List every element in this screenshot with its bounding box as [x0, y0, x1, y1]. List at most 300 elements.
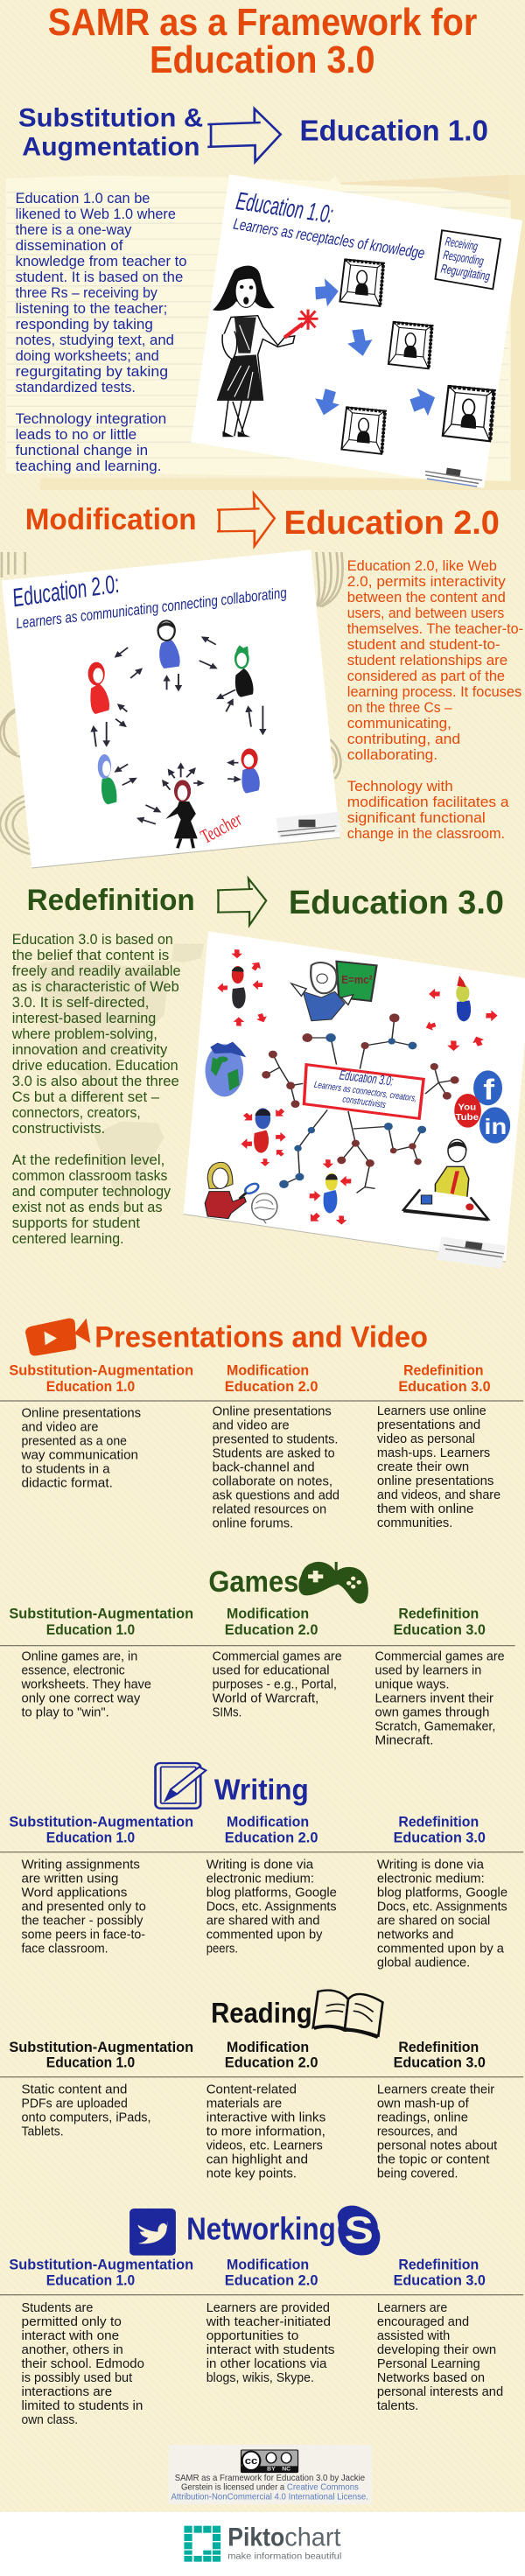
text: networking substitution column: own class.: [21, 2413, 78, 2427]
sketch title: Learners as receptacles of knowledge: [232, 214, 426, 262]
text: presentations modification column: collaborate on notes,: [213, 1475, 332, 1488]
text: writing modification column: [206, 1858, 337, 1956]
creative commons badge: NC: [282, 2467, 290, 2473]
column headers: Modification: [227, 2257, 309, 2272]
text block: education 3.0 description: Cs but a different set –: [12, 1088, 159, 1105]
text: presentations redefinition column: create their own: [377, 1460, 469, 1474]
column headers: Education 1.0: [46, 1378, 135, 1395]
text: writing modification column: electronic medium:: [206, 1872, 314, 1886]
text: writing redefinition column: networks and: [377, 1928, 453, 1942]
text block: education 3.0 description: and computer technology: [12, 1183, 171, 1200]
text block: education 2.0 description: modification facilitates a: [347, 794, 509, 810]
column headers: Education 2.0: [225, 1621, 318, 1638]
license stamp: [438, 1236, 506, 1269]
text: presentations substitution column: Online presentations: [21, 1407, 141, 1420]
heading: writing: [156, 1763, 309, 1809]
text: networking substitution column: interactions are: [21, 2385, 112, 2399]
heading: reading: [211, 1991, 382, 2038]
column headers: Substitution-Augmentation: [9, 1362, 193, 1378]
text: networking redefinition column: assisted with: [377, 2329, 450, 2343]
three Rs box: Receiving: [444, 235, 480, 254]
sketch: education 2.0: [2, 550, 341, 868]
text block: education 3.0 description: the belief that content is: [12, 947, 169, 963]
text block: education 2.0 description: 2.0, permits interactivity: [347, 573, 506, 590]
text: networking redefinition column: Networks based on: [377, 2371, 485, 2385]
text: games redefinition column: used by learners in: [375, 1664, 481, 1677]
text: reading modification column: videos, etc. Learners: [206, 2139, 323, 2152]
text: writing modification column: commented upon by: [206, 1928, 323, 1942]
sketch title: [10, 569, 288, 632]
text: writing substitution column: [21, 1858, 146, 1956]
column headers: Redefinition: [398, 2039, 479, 2055]
text: writing substitution column: Writing assignments: [21, 1858, 140, 1872]
text: networking redefinition column: [377, 2301, 503, 2413]
text block: education 3.0 description: [11, 931, 181, 1247]
three Rs box: [435, 230, 500, 289]
text: presentations substitution column: didactic format.: [21, 1477, 113, 1490]
text: presentations modification column: presented to students.: [213, 1433, 338, 1446]
heading: games: [208, 1562, 368, 1604]
text block: education 1.0 description: standardized tests.: [16, 379, 136, 396]
social media icons: You: [458, 1102, 476, 1112]
column headers: Education 3.0: [394, 2272, 486, 2288]
three Rs box: Regurgitating: [439, 262, 492, 284]
section: networking and footer: [0, 2206, 523, 2562]
logo mark: [184, 2526, 220, 2562]
text: writing modification column: blog platforms, Google: [206, 1886, 337, 1900]
text block: education 1.0 description: functional change in: [16, 443, 148, 458]
sketch title: Learners as communicating connecting collaborating: [15, 584, 288, 632]
license stamp: [425, 468, 482, 486]
text block: education 1.0 description: likened to Web 1.0 where: [16, 206, 176, 222]
text: networking substitution column: limited to students in: [21, 2399, 143, 2413]
text block: education 3.0 description: exist not as ends but as: [12, 1199, 163, 1215]
text: reading redefinition column: being covered.: [377, 2167, 458, 2180]
text block: education 3.0 description: constructivists.: [12, 1120, 105, 1137]
text block: education 3.0 description: supports for student: [12, 1214, 140, 1231]
text: networking modification column: blogs, wikis, Skype.: [206, 2371, 314, 2385]
text block: education 2.0 description: between the content and: [347, 589, 506, 606]
text: writing redefinition column: global audience.: [377, 1956, 470, 1970]
text: writing substitution column: some peers in face-to-: [21, 1928, 145, 1942]
text: reading redefinition column: readings, online: [377, 2111, 468, 2124]
decorative stripes: [0, 552, 343, 854]
icon: skype: S: [345, 2208, 374, 2251]
text: networking modification column: [206, 2301, 335, 2385]
arrow: [217, 878, 266, 925]
column headers: Education 2.0: [225, 1378, 318, 1395]
learner figures: [232, 966, 471, 1214]
text: presentations modification column: [213, 1405, 340, 1530]
text: networking redefinition column: encouraged and: [377, 2315, 469, 2329]
section: redefinition: [11, 878, 525, 1269]
heading: modification: Modification: [25, 502, 197, 536]
column headers: Modification: [227, 1814, 309, 1830]
text: reading substitution column: Static content and: [21, 2083, 127, 2096]
text: presentations modification column: and video are: [213, 1419, 290, 1432]
license stamp: [276, 812, 341, 838]
title box: [304, 1065, 424, 1118]
text: presentations substitution column: way communication: [21, 1449, 138, 1462]
title box: Learners as connectors, creators,: [313, 1080, 417, 1104]
text block: education 2.0 description: considered as part of the: [347, 668, 505, 684]
man at desk: [403, 1139, 488, 1220]
column headers: Redefinition: [403, 1362, 484, 1378]
text: writing modification column: Docs, etc. Assignments: [206, 1900, 337, 1914]
text: games modification column: SIMs.: [213, 1706, 242, 1719]
text block: education 2.0 description: on the three Cs –: [347, 699, 452, 716]
column headers: Education 3.0: [394, 1830, 486, 1845]
heading: networking: [130, 2206, 380, 2256]
text block: education 1.0 description: student. It is based on the: [16, 270, 183, 285]
text: networking modification column: in other locations via: [206, 2357, 327, 2371]
icon: video camera: [25, 1319, 90, 1355]
column headers: Education 1.0: [46, 1830, 135, 1845]
column headers: Education 2.0: [225, 2272, 318, 2288]
column headers: Modification: [227, 2039, 309, 2055]
text block: education 1.0 description: regurgitating by taking: [16, 364, 168, 380]
text: reading redefinition column: personal notes about: [377, 2139, 498, 2152]
license box: [168, 2445, 373, 2504]
text block: education 2.0 description: Education 2.0, like Web: [347, 557, 497, 574]
section: writing, reading: [0, 1763, 523, 2180]
text: reading substitution column: onto computers, iPads,: [21, 2111, 151, 2124]
text block: education 1.0 description: Technology integration: [16, 410, 166, 427]
title: Education 3.0: [150, 38, 375, 81]
text: reading substitution column: Tablets.: [21, 2125, 64, 2138]
text: games redefinition column: Commercial games are: [375, 1650, 505, 1663]
text block: education 3.0 description: 3.0. It is self-directed,: [12, 994, 149, 1011]
column headers: Substitution-Augmentation: [9, 2039, 193, 2055]
text: networking substitution column: interact with one: [21, 2329, 119, 2343]
text block: education 3.0 description: freely and readily available: [12, 962, 181, 979]
text block: education 3.0 description: Education 3.0 is based on: [12, 931, 173, 948]
text: networking substitution column: [21, 2301, 144, 2427]
text: games redefinition column: own games through: [375, 1706, 489, 1719]
creative commons badge: BY: [267, 2467, 276, 2473]
section: presentations and video, games: [0, 1319, 523, 1747]
heading: substitution and augmentation: Substitution &: [18, 103, 203, 132]
column headers: [9, 1362, 491, 1395]
text: reading modification column: interactive with links: [206, 2111, 326, 2124]
text: games substitution column: [21, 1650, 151, 1719]
text: presentations substitution column: to students in a: [21, 1463, 110, 1476]
text block: education 1.0 description: listening to the teacher;: [16, 300, 167, 317]
text: games substitution column: essence, electronic: [21, 1664, 125, 1677]
brain: [252, 1194, 277, 1223]
heading: education 1.0: Education 1.0: [299, 116, 488, 147]
blonde teacher with magnifier: [205, 1162, 261, 1219]
column headers: Education 3.0: [394, 2054, 486, 2070]
heading: networking: Networking: [186, 2212, 336, 2247]
text: networking modification column: Learners are provided: [206, 2301, 330, 2315]
text: games substitution column: only one correct way: [21, 1692, 140, 1705]
text: networking substitution column: Students are: [21, 2301, 94, 2315]
text: presentations modification column: ask questions and add: [213, 1489, 340, 1502]
text: reading modification column: Content-related: [206, 2083, 297, 2096]
text block: education 1.0 description: knowledge from teacher to: [16, 253, 187, 270]
text: reading redefinition column: the topic or content: [377, 2153, 490, 2166]
text: reading redefinition column: own mash-up of: [377, 2097, 469, 2110]
icon: pencil and paper: [156, 1763, 206, 1809]
text: reading substitution column: PDFs are uploaded: [21, 2097, 128, 2110]
text: reading modification column: note key points.: [206, 2167, 297, 2180]
logo wordmark: Pikto: [228, 2522, 284, 2552]
column headers: Redefinition: [398, 1606, 479, 1621]
license text: Creative Commons: [287, 2482, 359, 2492]
text: writing modification column: peers.: [206, 1942, 238, 1956]
text block: education 3.0 description: innovation and creativity: [12, 1041, 168, 1058]
footer band: [0, 2512, 525, 2576]
social media icons: [454, 1070, 510, 1144]
text block: education 1.0 description: notes, studying text, and: [16, 332, 174, 348]
einstein at chalkboard: [291, 962, 376, 1021]
icon: twitter: [130, 2208, 176, 2256]
text block: education 1.0 description: [16, 191, 187, 474]
icon: skype: [338, 2206, 380, 2255]
text: writing redefinition column: [377, 1858, 508, 1970]
text block: education 2.0 description: Technology with: [347, 778, 453, 794]
sketch: education 3.0: [184, 931, 525, 1269]
text: networking substitution column: another, others in: [21, 2343, 123, 2357]
text: games redefinition column: [375, 1650, 505, 1747]
einstein at chalkboard: E=mc²: [341, 974, 373, 987]
text: reading modification column: [206, 2083, 326, 2180]
mind map network: [262, 1013, 459, 1193]
license text: [172, 2474, 368, 2502]
heading: presentations and video: Presentations and Video: [94, 1320, 428, 1354]
text: reading modification column: to more information,: [206, 2125, 326, 2138]
text block: education 2.0 description: student and student-to-: [347, 636, 500, 653]
icon: game controller: [298, 1562, 368, 1604]
heading: writing: Writing: [214, 1774, 309, 1806]
text block: education 2.0 description: student relationships are: [347, 652, 508, 668]
text: games substitution column: worksheets. They have: [21, 1678, 151, 1691]
text: reading substitution column: [21, 2083, 151, 2138]
heading: redefinition: Redefinition: [27, 883, 195, 916]
text block: education 3.0 description: centered learning.: [12, 1230, 124, 1247]
text: games substitution column: to play to "win".: [21, 1706, 109, 1719]
text: presentations substitution column: [21, 1407, 141, 1490]
text: networking redefinition column: Personal Learning: [377, 2357, 480, 2371]
text: games substitution column: Online games are, in: [21, 1650, 137, 1663]
piktochart logo: make information beautiful: [228, 2552, 341, 2561]
text: writing redefinition column: Writing is done via: [377, 1858, 484, 1872]
heading: substitution and augmentation: Augmentation: [22, 131, 200, 161]
column headers: Education 3.0: [394, 1621, 486, 1638]
text: games redefinition column: Scratch, Gamemaker,: [375, 1720, 495, 1733]
column headers: Education 1.0: [46, 2054, 135, 2070]
license text: Gerstein is licensed under a: [181, 2482, 284, 2492]
column headers: Substitution-Augmentation: [9, 1606, 193, 1621]
text block: education 1.0 description: teaching and learning.: [16, 458, 161, 474]
student figures: [88, 620, 260, 804]
text: writing redefinition column: blog platforms, Google: [377, 1886, 508, 1900]
title box: Education 3.0:: [339, 1068, 395, 1089]
student boxes: [340, 259, 383, 306]
text: presentations modification column: related resources on: [213, 1503, 326, 1516]
text: networking substitution column: their school. Edmodo: [21, 2357, 144, 2371]
text: games redefinition column: Minecraft.: [375, 1734, 434, 1747]
column headers: Substitution-Augmentation: [9, 1814, 193, 1830]
sketch title: Education 2.0:: [10, 569, 122, 612]
social media icons: in: [484, 1114, 507, 1139]
text: presentations redefinition column: and videos, and share: [377, 1488, 500, 1502]
text: writing redefinition column: are shared on social: [377, 1914, 490, 1928]
text: networking redefinition column: talents.: [377, 2399, 418, 2413]
text block: education 1.0 description: Education 1.0 can be: [16, 191, 150, 206]
text: writing substitution column: face classroom.: [21, 1942, 108, 1956]
text: games modification column: purposes - e.g., Portal,: [213, 1678, 337, 1691]
text: reading redefinition column: [377, 2083, 498, 2180]
text: writing modification column: Writing is done via: [206, 1858, 313, 1872]
column headers: Education 3.0: [398, 1378, 491, 1395]
section: substitution and augmentation: [6, 1, 525, 490]
text block: education 1.0 description: leads to no or little: [16, 426, 136, 443]
text: networking modification column: interact with students: [206, 2343, 335, 2357]
column headers: Redefinition: [398, 1814, 479, 1830]
piktochart logo: [184, 2522, 341, 2562]
text block: education 1.0 description: three Rs – receiving by: [16, 285, 158, 301]
text: presentations modification column: online forums.: [213, 1517, 293, 1530]
globe: [206, 1042, 246, 1096]
column headers: [9, 2039, 486, 2070]
text: reading modification column: can highlight and: [206, 2153, 308, 2166]
text: presentations redefinition column: Learners use online: [377, 1404, 486, 1418]
column headers: Education 2.0: [225, 2054, 318, 2070]
text: presentations redefinition column: online presentations: [377, 1474, 494, 1488]
text: presentations redefinition column: communities.: [377, 1516, 452, 1530]
text block: education 2.0 description: contributing, and: [347, 731, 460, 747]
column headers: Modification: [227, 1606, 309, 1621]
text: presentations modification column: Students are asked to: [213, 1447, 335, 1460]
heading: education 2.0: Education 2.0: [284, 504, 500, 541]
text: games modification column: World of Warcraft,: [213, 1692, 318, 1705]
text: writing substitution column: and presented only to: [21, 1900, 146, 1914]
text: reading redefinition column: Learners create their: [377, 2083, 494, 2096]
three Rs box: Responding: [442, 248, 485, 269]
text: networking modification column: with teacher-initiated: [206, 2315, 331, 2329]
arrow: [217, 494, 275, 546]
text block: education 1.0 description: there is a one-way: [16, 222, 132, 238]
text: games modification column: used for educational: [213, 1664, 330, 1677]
teacher label: Teacher: [196, 808, 248, 848]
text: games modification column: [213, 1650, 342, 1719]
text: networking redefinition column: developing their own: [377, 2343, 496, 2357]
text: presentations redefinition column: them with online: [377, 1502, 474, 1516]
heading: presentations and video: [25, 1319, 428, 1355]
column headers: Education 1.0: [46, 2272, 135, 2288]
license text: SAMR as a Framework for Education 3.0 by Jackie: [175, 2474, 365, 2483]
sketch title: Education 1.0:: [234, 187, 335, 229]
section: modification: [0, 494, 523, 868]
text: networking modification column: opportunities to: [206, 2329, 299, 2343]
license text: Attribution-NonCommercial 4.0 International License.: [172, 2492, 368, 2502]
creative commons badge: [242, 2450, 298, 2473]
column headers: [9, 1814, 486, 1845]
text: networking substitution column: permitted only to: [21, 2315, 122, 2329]
blue arrows: [312, 277, 440, 419]
text block: education 3.0 description: common classroom tasks: [12, 1167, 168, 1184]
text: games redefinition column: unique ways.: [375, 1678, 450, 1691]
text block: education 3.0 description: 3.0 is also about the three: [12, 1073, 179, 1089]
column headers: Education 2.0: [225, 1830, 318, 1845]
icon: open book: [313, 1991, 382, 2038]
text block: education 2.0 description: change in the classroom.: [347, 825, 505, 842]
text: writing redefinition column: commented upon by a: [377, 1942, 504, 1956]
text: networking substitution column: is possibly used but: [21, 2371, 133, 2385]
text: networking redefinition column: personal interests and: [377, 2385, 503, 2399]
social media icons: f: [483, 1074, 495, 1106]
arrow: [207, 108, 281, 162]
text: reading modification column: materials are: [206, 2097, 282, 2110]
column headers: [9, 2257, 486, 2288]
teacher figure: [213, 266, 318, 437]
piktochart logo: chart: [284, 2522, 341, 2552]
text block: education 2.0 description: significant functional: [347, 809, 486, 826]
text block: education 3.0 description: At the redefinition level,: [12, 1152, 164, 1168]
torn paper panel: [6, 175, 525, 490]
text block: education 3.0 description: as is characteristic of Web: [12, 978, 179, 995]
heading: substitution and augmentation: [18, 103, 203, 161]
text: writing redefinition column: electronic medium:: [377, 1872, 485, 1886]
text block: education 2.0 description: communicating,: [347, 715, 452, 732]
text: writing substitution column: are written using: [21, 1872, 118, 1886]
text block: education 3.0 description: where problem-solving,: [11, 1026, 158, 1042]
text block: education 1.0 description: doing worksheets; and: [16, 347, 159, 364]
column headers: Redefinition: [398, 2257, 479, 2272]
text: presentations redefinition column: video as personal: [377, 1432, 475, 1446]
title: [48, 1, 477, 81]
column headers: Substitution-Augmentation: [9, 2257, 193, 2272]
social media icons: Tube: [456, 1113, 479, 1123]
text: games redefinition column: Learners invent their: [375, 1692, 494, 1705]
text: writing modification column: are shared with and: [206, 1914, 319, 1928]
text: games modification column: Commercial games are: [213, 1650, 342, 1663]
text block: education 1.0 description: dissemination of: [16, 238, 123, 254]
text block: education 3.0 description: interest-based learning: [12, 1010, 156, 1026]
column headers: Modification: [227, 1362, 309, 1378]
text block: education 3.0 description: drive education. Education: [12, 1057, 178, 1074]
text: presentations substitution column: presented as a one: [21, 1435, 127, 1448]
text: writing substitution column: Word applications: [21, 1886, 128, 1900]
heading: games: Games: [208, 1564, 298, 1598]
text block: education 2.0 description: collaborating.: [347, 746, 438, 763]
sketch: education 1.0: [191, 174, 522, 488]
text: reading redefinition column: resources, and: [377, 2125, 458, 2138]
heading: reading: Reading: [211, 1998, 312, 2029]
text: presentations modification column: back-channel and: [213, 1461, 315, 1474]
text block: education 3.0 description: connectors, creators,: [12, 1104, 141, 1121]
text block: education 1.0 description: responding by taking: [16, 317, 153, 332]
text: presentations modification column: Online presentations: [213, 1405, 332, 1418]
text: presentations redefinition column: [377, 1404, 500, 1530]
column headers: [9, 1606, 486, 1638]
teacher figure: [165, 780, 198, 848]
sketch title: [232, 187, 426, 262]
text: writing substitution column: the teacher - possibly: [21, 1914, 143, 1928]
red arrows: [217, 949, 498, 1225]
text: presentations redefinition column: mash-ups. Learners: [377, 1446, 490, 1460]
text block: education 2.0 description: [347, 557, 523, 842]
text: presentations substitution column: and video are: [21, 1421, 99, 1434]
faint world map: [29, 943, 204, 1219]
text: presentations redefinition column: presentations and: [377, 1418, 480, 1432]
creative commons badge: cc: [245, 2455, 257, 2467]
column headers: Education 1.0: [46, 1621, 135, 1638]
title box: constructivists: [342, 1095, 387, 1110]
text: networking redefinition column: Learners are: [377, 2301, 447, 2315]
